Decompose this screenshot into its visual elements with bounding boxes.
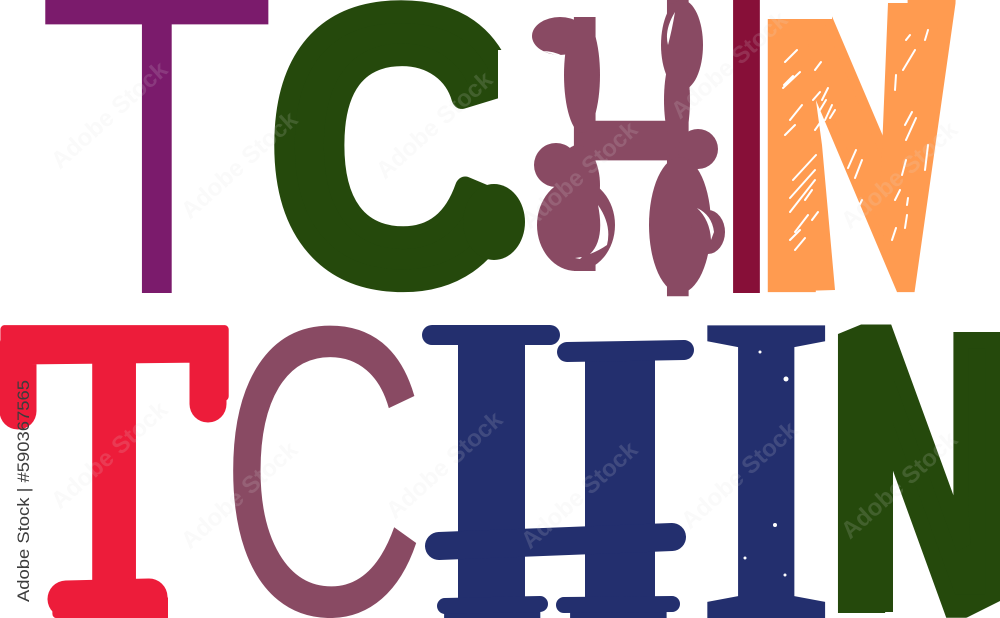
watermark: Adobe Stock [381, 406, 509, 524]
watermark: Adobe Stock [46, 56, 174, 174]
watermark: Adobe Stock [176, 436, 304, 554]
watermark: Adobe Stock [176, 106, 304, 224]
watermark: Adobe Stock [836, 116, 964, 234]
watermark: Adobe Stock [46, 396, 174, 514]
watermark: Adobe Stock [836, 426, 964, 544]
watermark: Adobe Stock [371, 66, 499, 184]
watermark: Adobe Stock [676, 416, 804, 534]
bottom word: TCHIN [0, 221, 1000, 618]
vertical credit text: Adobe Stock | #590367565 [14, 380, 33, 602]
watermark: Adobe Stock [666, 6, 794, 124]
top word: TCHIN [32, 0, 972, 391]
watermark: Adobe Stock [516, 436, 644, 554]
watermark: Adobe Stock [516, 116, 644, 234]
